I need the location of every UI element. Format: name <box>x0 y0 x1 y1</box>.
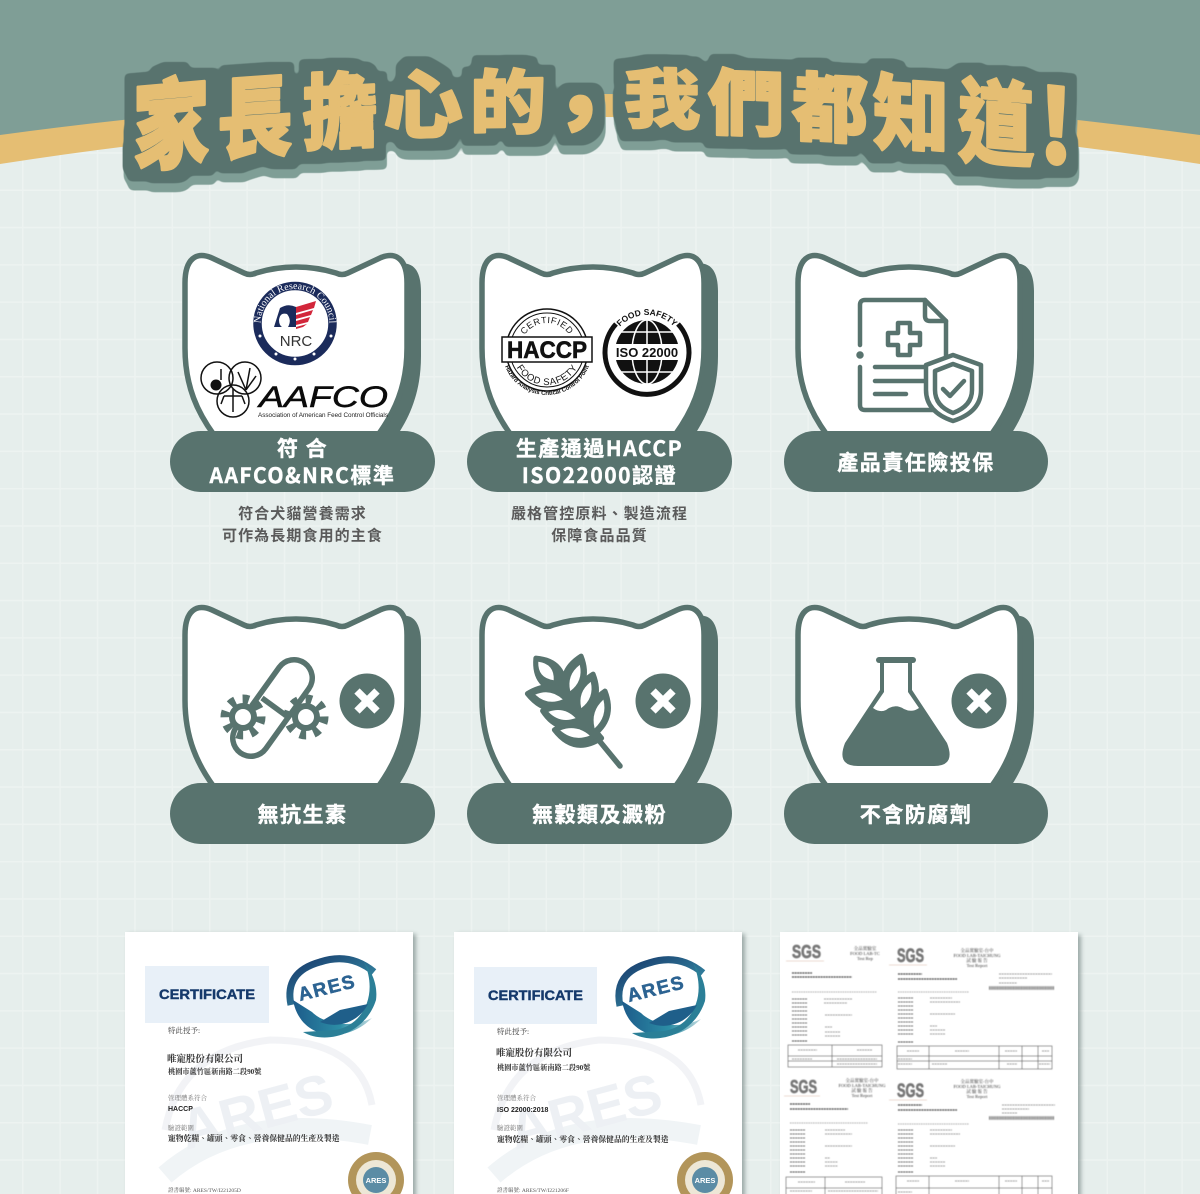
HACCP logo: FOOD SAFETY <box>517 364 576 386</box>
label pill: 生產通過HACCP <box>516 433 683 463</box>
report: bottom right: FOOD LAB-TAICHUNG <box>953 1084 1001 1089</box>
card: no grain or starch <box>467 608 732 844</box>
label pill <box>170 783 435 844</box>
certificate text: HACCP <box>168 1106 193 1113</box>
card: product liability insurance <box>784 256 1048 492</box>
certificate text: 管理體系符合 <box>168 1093 208 1102</box>
card: no preservatives <box>784 608 1048 844</box>
title: 擔 <box>303 44 377 167</box>
watermark: ARES <box>502 1060 668 1162</box>
NRC logo <box>253 282 337 366</box>
label pill <box>467 431 732 492</box>
icon: insurance document and shield <box>858 300 981 421</box>
certificate heading <box>474 967 597 1024</box>
label pill: AAFCO&NRC標準 <box>209 460 395 490</box>
report: top left: 全品實驗室 <box>854 945 877 952</box>
report: bottom right: 全品實驗室-台中 <box>960 1078 994 1085</box>
report: bottom right: SGS <box>897 1081 924 1102</box>
report: top left <box>786 942 882 1067</box>
report: top left: FOOD LAB-TC <box>850 951 880 956</box>
report: bottom right <box>889 1078 1055 1194</box>
shield shadow and outline <box>185 608 421 795</box>
description: 保障食品品質 <box>551 524 648 546</box>
certificate text: ISO 22000:2018 <box>497 1107 548 1114</box>
certificate: ARES HACCP <box>125 932 416 1194</box>
certificate text: 唯寵股份有限公司 <box>167 1053 243 1065</box>
label pill: 無穀類及澱粉 <box>532 799 667 829</box>
SGS test reports sheet <box>780 932 1081 1194</box>
label pill: 無抗生素 <box>258 799 348 829</box>
label pill <box>170 431 435 492</box>
report: bottom right: Test Report <box>967 1094 988 1099</box>
title: 道 <box>958 48 1034 188</box>
report: bottom left: 全品實驗室-台中 <box>846 1077 879 1084</box>
ARES logo: ARES <box>296 971 358 1006</box>
certificate: ARES ISO 22000 <box>454 932 745 1194</box>
icon: wheat <box>525 651 620 766</box>
card: HACCP and ISO22000 <box>467 252 732 546</box>
card: no antibiotics <box>170 608 435 844</box>
certificate text: 驗證範圍 <box>496 1123 523 1132</box>
description: 可作為長期食用的主食 <box>222 524 383 546</box>
ISO 22000 logo <box>602 309 692 397</box>
header band: arched gold stripe <box>0 0 1200 164</box>
report: top right: SGS <box>897 946 924 967</box>
watermark: ARES <box>173 1060 339 1162</box>
report: bottom left: SGS <box>790 1077 817 1097</box>
title: ， <box>535 41 625 171</box>
certificate text: 驗證範圍 <box>167 1123 194 1132</box>
label pill: ISO22000認證 <box>522 460 677 490</box>
description: 嚴格管控原料、製造流程 <box>511 502 688 524</box>
certificate text <box>496 1026 669 1194</box>
certificate text: 寵物乾糧、罐頭、零食、營養保健品的生產及製造 <box>168 1133 340 1143</box>
watermark <box>165 1040 372 1175</box>
shield shadow and outline <box>798 256 1034 443</box>
certificate text: 特此授予: <box>497 1026 529 1036</box>
AAFCO logo: Association of American Feed Control Officials <box>258 412 389 419</box>
HACCP logo: HACCP <box>507 337 587 364</box>
icon: capsule with germs <box>226 678 323 738</box>
ARES logo <box>619 959 705 1038</box>
certificate text: 管理體系符合 <box>497 1093 536 1102</box>
title: 長 <box>218 45 292 178</box>
certificate heading: CERTIFICATE <box>159 987 255 1002</box>
description: 符合犬貓營養需求 <box>238 502 367 524</box>
label pill: 符 合 <box>277 433 328 463</box>
title: 們 <box>708 45 784 152</box>
report: bottom left <box>784 1077 886 1194</box>
certificate heading: CERTIFICATE <box>488 988 583 1003</box>
report: top left: Test Rep <box>857 956 874 961</box>
title: ! <box>1039 45 1073 194</box>
certificate text: 證書編號: ARES/TW/I221206F <box>497 1186 569 1194</box>
shield shadow and outline <box>798 608 1034 795</box>
card: AAFCO and NRC <box>170 252 435 546</box>
report: top left: SGS <box>792 942 821 962</box>
title: 心 <box>384 46 462 156</box>
report: bottom right: 試 驗 報 告 <box>966 1088 988 1095</box>
gold seal: ARES <box>695 1176 715 1185</box>
AAFCO logo: AAFCO <box>257 381 388 414</box>
label pill: 不含防腐劑 <box>860 799 972 829</box>
gold seal <box>348 1152 404 1194</box>
report: bottom left: FOOD LAB-TAICHUNG <box>838 1083 886 1088</box>
report: bottom left: 試 驗 報 告 <box>851 1087 873 1094</box>
certificate text: 桃園市蘆竹區新南路二段90號 <box>497 1063 590 1072</box>
shield shadow and outline <box>185 256 421 443</box>
gold seal: ARES <box>366 1176 386 1185</box>
icon: cross mark <box>636 674 690 728</box>
ARES logo: ARES <box>625 972 687 1007</box>
title: 我 <box>624 48 700 143</box>
label pill <box>784 431 1048 492</box>
certificate text: 唯寵股份有限公司 <box>496 1047 572 1059</box>
label pill <box>467 783 732 844</box>
label pill <box>784 783 1048 844</box>
icon: cross mark <box>952 674 1006 728</box>
ISO 22000 logo: ISO 22000 <box>616 345 678 360</box>
description <box>511 502 688 546</box>
certificate text: 桃園市蘆竹區新南路二段90號 <box>168 1067 261 1076</box>
NRC logo: NRC <box>280 333 312 350</box>
report: top right: FOOD LAB-TAICHUNG <box>953 953 1001 958</box>
report: top right: 全品實驗室-台中 <box>960 947 994 954</box>
description <box>222 502 383 546</box>
ISO 22000 logo: FOOD SAFETY <box>616 309 678 326</box>
shield shadow and outline <box>482 256 718 443</box>
certificate heading <box>145 966 269 1023</box>
NRC logo: National Research Council <box>254 284 336 324</box>
AAFCO logo <box>201 362 389 419</box>
gold seal <box>677 1152 733 1194</box>
report: top right: 試 驗 報 告 <box>966 957 988 964</box>
label pill: 產品責任險投保 <box>837 447 995 477</box>
header band: green arch <box>0 0 1200 135</box>
certificate text: 特此授予: <box>168 1025 200 1035</box>
certificate text: 證書編號: ARES/TW/I221205D <box>168 1186 241 1194</box>
report: top right <box>889 946 1054 1069</box>
shield shadow and outline <box>482 608 718 795</box>
icon: flask <box>842 657 950 766</box>
HACCP logo: CERTIFIED <box>521 316 572 334</box>
certificate text <box>167 1025 340 1194</box>
icon: cross mark <box>340 674 394 728</box>
title: 家 <box>133 45 209 192</box>
report: top right: Test Report <box>967 963 988 968</box>
HACCP logo: Hazard Analysis Critical Control Point <box>505 365 589 395</box>
title <box>133 41 1073 194</box>
certificate text: 寵物乾糧、罐頭、零食、營養保健品的生產及製造 <box>497 1134 669 1144</box>
title: 知 <box>873 46 949 171</box>
title: 都 <box>792 46 868 159</box>
ARES logo <box>290 958 376 1037</box>
watermark <box>494 1040 701 1175</box>
HACCP logo <box>501 308 593 395</box>
title: 的 <box>470 46 546 149</box>
report: bottom left: Test Report <box>852 1093 873 1098</box>
